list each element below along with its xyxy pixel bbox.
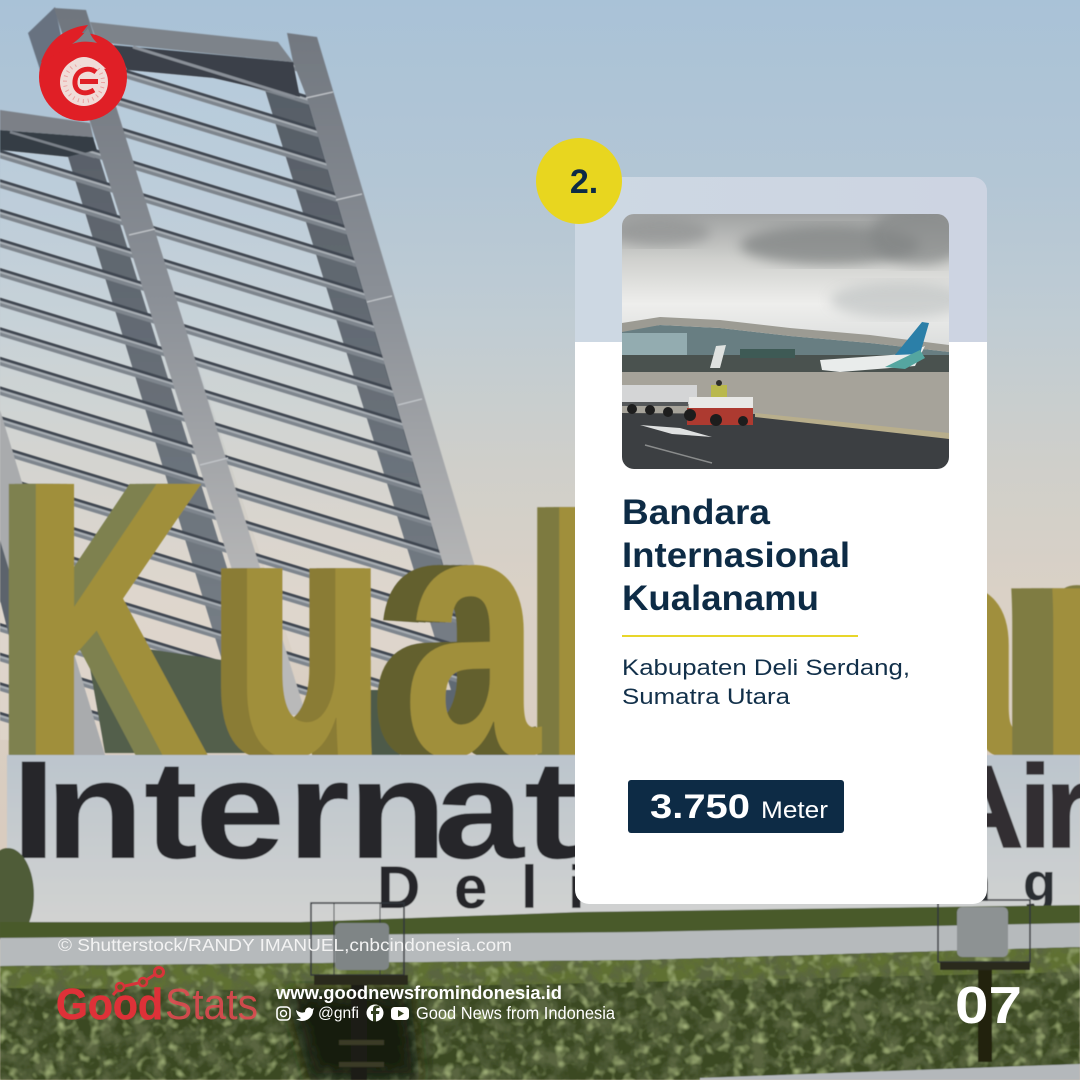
website and social links [275, 983, 615, 1023]
giant letter l side: l [520, 447, 589, 828]
page number: 07 [955, 977, 1022, 1035]
lattice gaps highlight main [98, 62, 470, 660]
icon: youtube [391, 1007, 409, 1020]
GoodStats logo [56, 968, 258, 1029]
baggage tug [622, 380, 753, 426]
rank badge: 2. [570, 163, 598, 201]
location text: Sumatra Utara [622, 684, 791, 709]
bottom right strip [700, 1064, 1080, 1080]
giant letter a side: a [391, 435, 530, 830]
airport name heading [622, 493, 850, 618]
giant letter K side: K [0, 400, 189, 839]
lamp left [311, 903, 408, 1080]
icon: twitter [296, 1008, 314, 1021]
giant letter a side: a [397, 435, 536, 830]
card background white [575, 342, 987, 904]
sign text International: Internat [11, 732, 578, 888]
photo credit: © Shutterstock/RANDY IMANUEL,cnbcindonesia.com [58, 935, 512, 955]
runway length badge: Meter [761, 797, 828, 824]
GoodStats logo: Stats [165, 980, 258, 1029]
GoodStats logo: Good [56, 980, 163, 1029]
icon: instagram [277, 1007, 290, 1020]
website and social links: www.goodnewsfromindonesia.id [275, 983, 562, 1003]
page name: Good News from Indonesia [416, 1003, 615, 1023]
sign base wall [7, 755, 1080, 927]
terminal building [622, 325, 949, 355]
giant letter K side: K [4, 400, 196, 839]
upper hedge [0, 905, 1080, 942]
airport photo [622, 214, 949, 469]
hedge leaf shadows [0, 947, 1080, 1080]
icon: facebook [366, 1004, 384, 1022]
right leg dark band [265, 90, 480, 690]
lattice slats left section [0, 140, 290, 740]
giant letters front: K [18, 400, 210, 839]
far left column [0, 410, 105, 755]
left shrub [0, 848, 34, 942]
giant letters front [18, 400, 611, 839]
yellow divider [622, 635, 858, 637]
column seams [129, 92, 422, 465]
giant letter a side: a [384, 435, 523, 830]
location text: Kabupaten Deli Serdang, [622, 655, 910, 680]
main column [54, 8, 306, 715]
main frame gusset [113, 45, 300, 97]
giant letter l side: l [536, 447, 605, 828]
airport name heading: Internasional [622, 536, 850, 575]
giant letter u side: u [219, 435, 377, 830]
road [622, 413, 949, 469]
sign text Deli Serdang: Deli [377, 854, 585, 921]
giant letters front: l [542, 447, 611, 828]
giant letters front: u [231, 435, 389, 830]
hedge shadow under lamp [285, 990, 420, 1080]
grey wall [0, 923, 1080, 967]
lattice slats main section [98, 62, 500, 730]
right post [287, 33, 512, 690]
second frame top beam [0, 110, 93, 137]
second frame gusset [0, 130, 97, 157]
apron [622, 372, 949, 433]
airport name heading: Kualanamu [622, 579, 819, 618]
lattice gaps highlight [0, 140, 290, 740]
far left dark band [0, 525, 10, 640]
logo: red G badge [39, 25, 127, 121]
hedge sunlit top [0, 947, 1080, 990]
giant letters front: a [403, 435, 542, 830]
foliage behind letters [85, 640, 250, 753]
giant letter K side: K [11, 400, 203, 839]
runway length badge [628, 780, 844, 833]
rank badge [536, 138, 622, 224]
hedge leaf highlights [0, 947, 1080, 1080]
airplane [820, 322, 929, 372]
card background upper tint [575, 177, 987, 342]
giant letters right side, behind card: a [888, 471, 1027, 823]
main frame top beam [90, 22, 293, 62]
giant letter u side: u [212, 435, 370, 830]
left frame dark band [68, 150, 262, 680]
giant letter l side: l [528, 447, 597, 828]
airport name heading: Bandara [622, 493, 771, 532]
corner side face [28, 7, 78, 110]
lower hedge [0, 947, 1080, 1080]
giant letter u side: u [225, 435, 383, 830]
background photo: airport sign: ng [958, 853, 1056, 913]
giant letter a side: a [377, 435, 516, 830]
giant letter a side: a [370, 435, 509, 830]
card: airport profile [575, 177, 987, 904]
location text [622, 655, 910, 709]
social handle: @gnfi [318, 1005, 359, 1022]
lamp right [938, 900, 1030, 1062]
runway length badge: 3.750 [650, 788, 750, 826]
giant letter u side: u [205, 435, 363, 830]
